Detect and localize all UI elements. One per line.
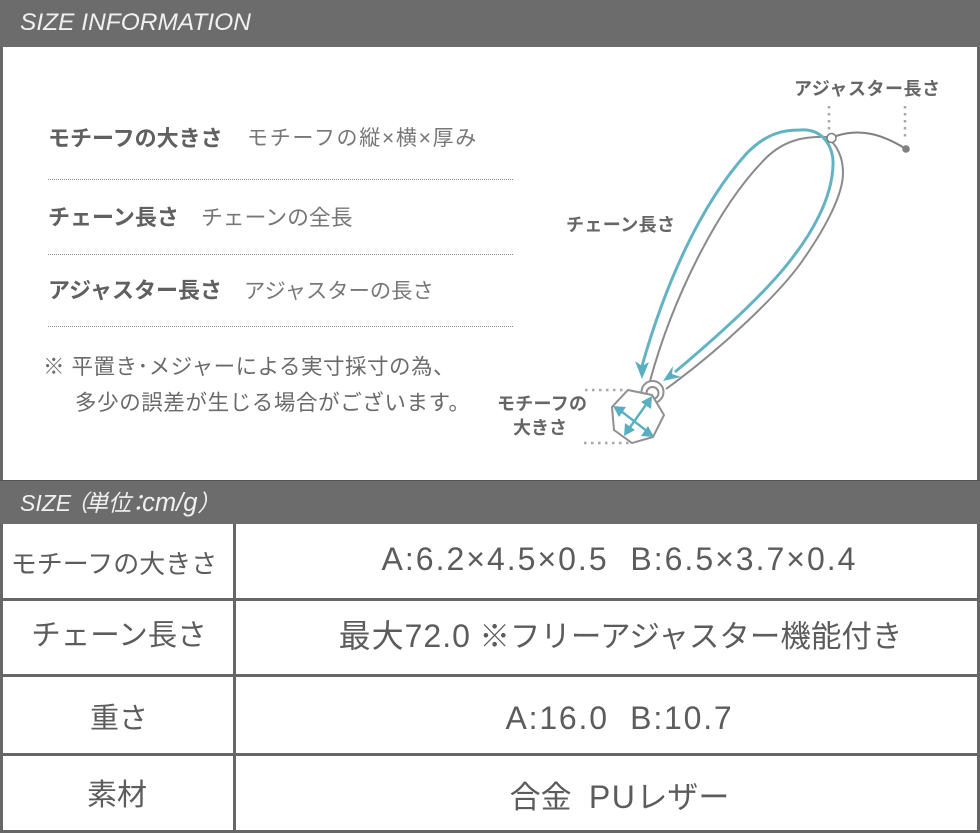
size arrows [613,396,654,437]
label: motif size: モチーフの [497,394,587,414]
motif dotted guides [584,390,630,443]
row: chain length description: チェーン長さ [48,205,179,230]
row: motif size description: モチーフの大きさ [48,126,223,151]
adjuster connector ring [827,134,836,142]
note text: 多少の誤差が生じる場合がございます。 [75,391,471,415]
heading: size table [0,480,980,524]
heading: size table: SIZE（単位：cm/g） [20,489,220,517]
row: motif size: モチーフの大きさ [11,549,217,579]
size table [3,524,977,833]
row: adjuster length description: アジャスター長さ [48,278,222,303]
motif ring [642,381,664,403]
teal chain arrow [635,130,833,381]
note text: ※ 平置き･メジャーによる実寸採寸の為、 [43,355,455,379]
adjuster tail [836,132,910,153]
value: weight: A:16.0 B:10.7 [505,700,734,736]
label: motif size [497,394,587,438]
note text [43,355,471,415]
diagram: necklace measurements [497,79,940,444]
octagon motif [612,390,664,443]
row: weight: 重さ [90,703,148,735]
row: adjuster length description [48,278,434,303]
row: chain length description [48,205,352,230]
row: motif size description: モチーフの縦×横×厚み [247,127,478,150]
label: adjuster length: アジャスター長さ [794,79,940,99]
row: material: 素材 [87,779,147,812]
value: chain length: 最大72.0 ※フリーアジャスター機能付き [339,618,902,654]
row: adjuster length description: アジャスターの長さ [244,279,434,303]
frame left border [0,0,3,833]
label: motif size: 大きさ [513,418,567,438]
row: chain length description: チェーンの全長 [201,205,352,230]
row: chain length: チェーン長さ [31,619,207,652]
row: motif size description [48,126,478,151]
heading: size information [0,0,980,47]
value: motif size: A:6.2×4.5×0.5 B:6.5×3.7×0.4 [382,541,857,577]
grey chain loop [650,137,843,389]
frame right border [977,0,980,833]
adjuster dotted guides [829,106,905,139]
value: material: 合金 PUレザー [510,779,729,815]
label: chain length: チェーン長さ [566,215,675,235]
heading: size information: SIZE INFORMATION [20,9,251,36]
